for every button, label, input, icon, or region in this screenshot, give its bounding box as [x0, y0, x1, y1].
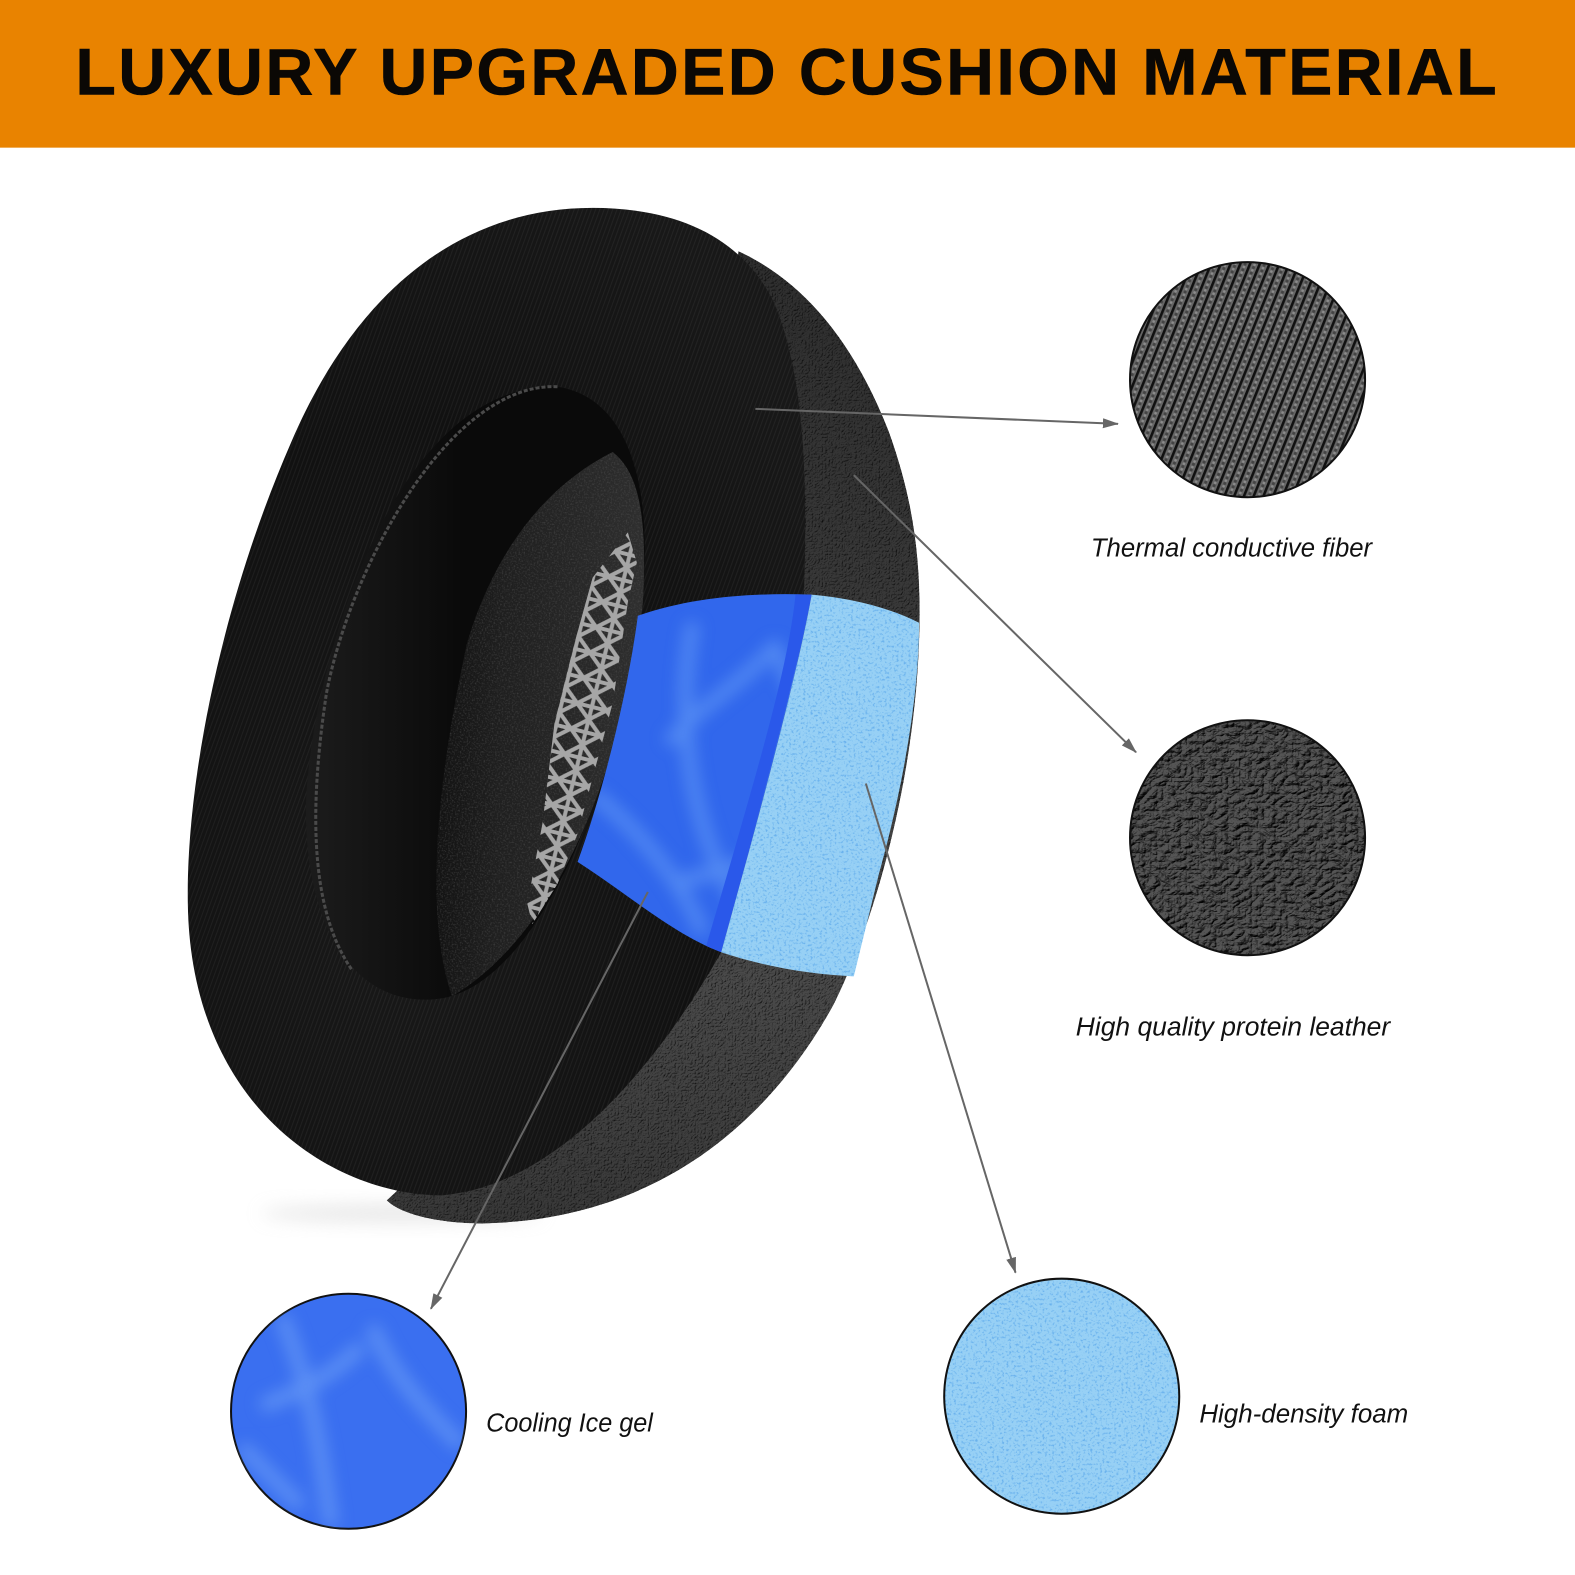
label: thermal conductive fiber: Thermal conductive fiber	[1091, 532, 1373, 562]
mesh lattice print	[527, 532, 637, 924]
pad front face: thermal fibre	[188, 208, 805, 1195]
speaker mesh	[436, 452, 644, 996]
material circle: cooling ice gel	[231, 1294, 466, 1529]
arrow: to high-density foam	[866, 783, 1016, 1273]
cutaway: cooling ice gel layer	[578, 594, 812, 952]
material circle: thermal conductive fiber	[1130, 262, 1365, 497]
material circle: high-density foam	[944, 1279, 1179, 1514]
cutaway: high-density foam layer	[721, 595, 919, 976]
title banner: LUXURY UPGRADED CUSHION MATERIAL	[75, 35, 1497, 109]
fibre sheen	[188, 208, 805, 1195]
arrow: to thermal fiber	[755, 409, 1118, 424]
arrow: to cooling gel	[431, 892, 648, 1309]
ground shadow	[261, 1205, 542, 1221]
label: high-density foam: High-density foam	[1199, 1398, 1408, 1428]
inner recess	[306, 387, 645, 1000]
arrow: to protein leather	[854, 475, 1136, 752]
title banner	[0, 0, 1575, 148]
label: high quality protein leather: High quality protein leather	[1076, 1012, 1391, 1042]
stitched seam	[316, 387, 557, 969]
material circle: protein leather	[1130, 720, 1365, 955]
label: cooling ice gel: Cooling Ice gel	[486, 1407, 654, 1437]
ear pad illustration	[188, 208, 920, 1223]
pad side band: protein leather	[387, 251, 920, 1223]
